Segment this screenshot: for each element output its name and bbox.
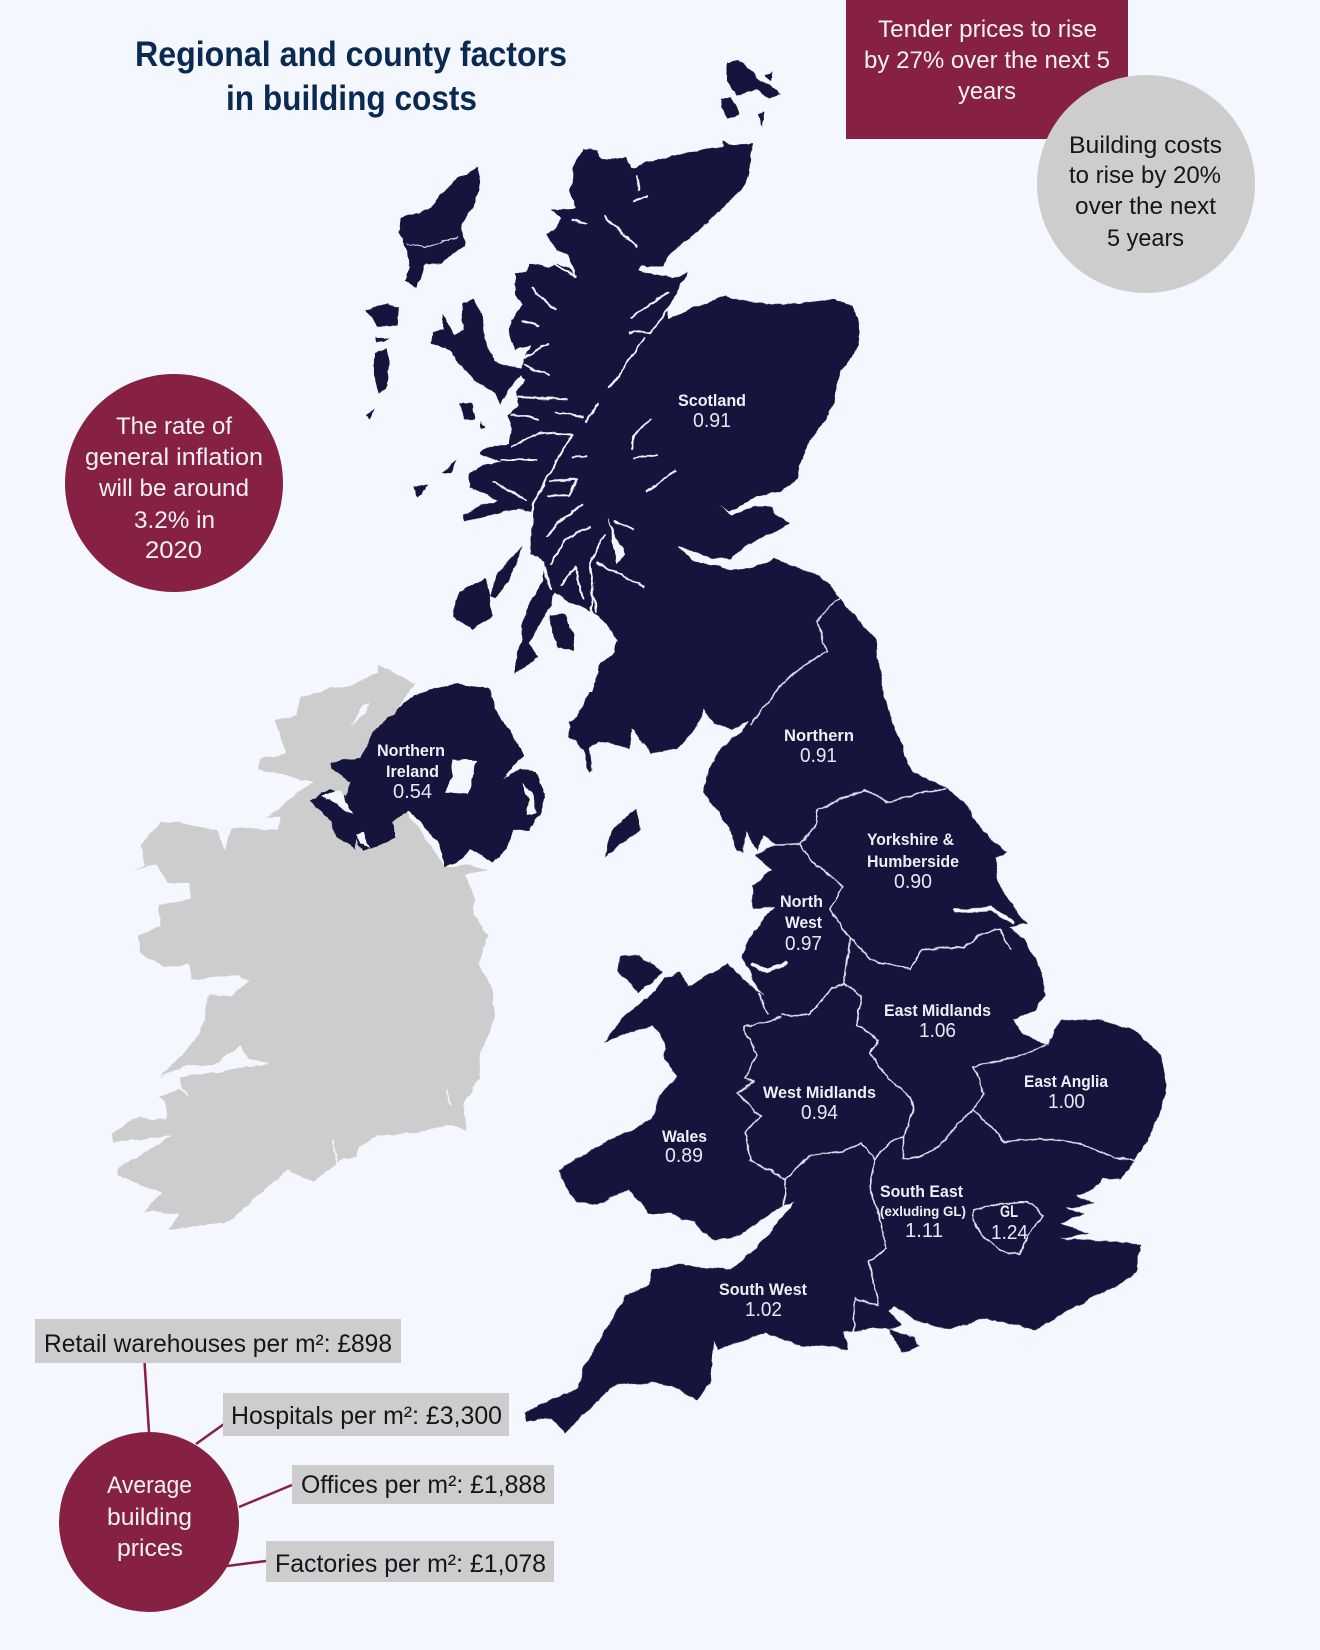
label: East Anglia [1024,1072,1108,1113]
callout: building costs: to rise by 20% [1069,162,1221,189]
price: retail warehouses: Retail warehouses per m²: £898 [44,1330,392,1358]
label: Greater London: GL [1000,1202,1018,1221]
callout: building costs [1037,75,1255,293]
label: Greater London [991,1202,1028,1244]
price: hospitals [223,1393,509,1436]
callout: general inflation: 2020 [145,537,202,564]
label: Scotland: 0.91 [693,410,731,432]
label: South East: (exluding GL) [880,1203,966,1219]
price: factories [266,1541,554,1582]
label: Northern [784,726,854,767]
callout: general inflation: general inflation [85,444,263,471]
label: South East: South East [880,1182,963,1201]
regional borders [737,788,1134,1333]
connector lines [145,1363,292,1566]
title: in building costs [226,79,477,118]
label: West Midlands: 0.94 [801,1102,838,1124]
label: Northern: Northern [784,726,854,745]
label: Northern Ireland: Northern [377,741,445,760]
map of the UK and Ireland [112,60,1167,1434]
label: North West: North [780,892,823,911]
label: Yorkshire and Humberside [867,830,959,893]
label: Wales: 0.89 [665,1145,703,1167]
callout: average building prices: building [107,1504,192,1531]
callout: building costs: 5 years [1107,225,1184,252]
price: offices: Offices per m²: £1,888 [301,1471,546,1499]
label: Greater London: 1.24 [991,1222,1028,1244]
label: East Midlands: East Midlands [884,1001,991,1020]
Anglesey, Isle of Man, Isle of Wight [605,809,920,1352]
callout: tender prices [846,0,1128,139]
callout: tender prices: by 27% over the next 5 [864,47,1110,74]
label: Wales [662,1127,707,1167]
callout: general inflation: will be around [98,475,249,502]
label: South East [880,1182,966,1242]
callout: tender prices: Tender prices to rise [878,16,1097,43]
label: East Anglia: 1.00 [1048,1091,1085,1113]
price: offices [292,1465,554,1504]
callout: average building prices: Average [107,1472,192,1499]
label: Northern: 0.91 [800,745,837,767]
map: England and Wales [525,693,1167,1434]
callout: average building prices: prices [117,1535,183,1562]
label: Northern Ireland: Ireland [386,762,439,781]
label: Yorkshire and Humberside: Humberside [867,852,959,871]
price: factories: Factories per m²: £1,078 [275,1550,546,1578]
Humber and Mersey estuaries [752,909,1013,971]
label: East Midlands: 1.06 [919,1020,956,1042]
label: South West [719,1280,807,1321]
callout: general inflation: 3.2% in [134,507,215,534]
label: South West: South West [719,1280,807,1299]
label: North West [780,892,823,955]
label: North West: West [785,913,822,932]
callout: building costs: over the next [1075,193,1216,220]
label: North West: 0.97 [785,933,822,955]
callout: general inflation [65,374,283,592]
label: South East: 1.11 [905,1220,943,1242]
map: Northern Ireland [309,684,545,866]
label: Scotland [678,391,746,432]
title [135,35,567,118]
label: Northern Ireland: 0.54 [393,781,432,803]
label: Yorkshire and Humberside: Yorkshire & [867,830,954,849]
label: West Midlands: West Midlands [763,1083,876,1102]
title: Regional and county factors [135,35,567,74]
price: retail warehouses [35,1319,401,1363]
Orkney [720,60,781,127]
Outer Hebrides, Skye and Inner Hebrides [365,167,574,652]
label: Wales: Wales [662,1127,707,1146]
callout: average building prices [59,1432,239,1612]
label: West Midlands [763,1083,876,1124]
border: Scotland and Northern England [751,598,840,725]
map: Scotland [365,60,885,700]
label: South West: 1.02 [745,1299,782,1321]
label: East Midlands [884,1001,991,1042]
map: Republic of Ireland [112,665,495,1230]
label: East Anglia: East Anglia [1024,1072,1108,1091]
label: Scotland: Scotland [678,391,746,410]
lochs and firths [494,176,676,611]
callout: general inflation: The rate of [116,413,232,440]
callout: tender prices: years [958,78,1016,105]
callout: building costs: Building costs [1069,132,1222,159]
label: Northern Ireland [377,741,445,803]
price: hospitals: Hospitals per m²: £3,300 [231,1402,502,1430]
label: Yorkshire and Humberside: 0.90 [894,871,932,893]
